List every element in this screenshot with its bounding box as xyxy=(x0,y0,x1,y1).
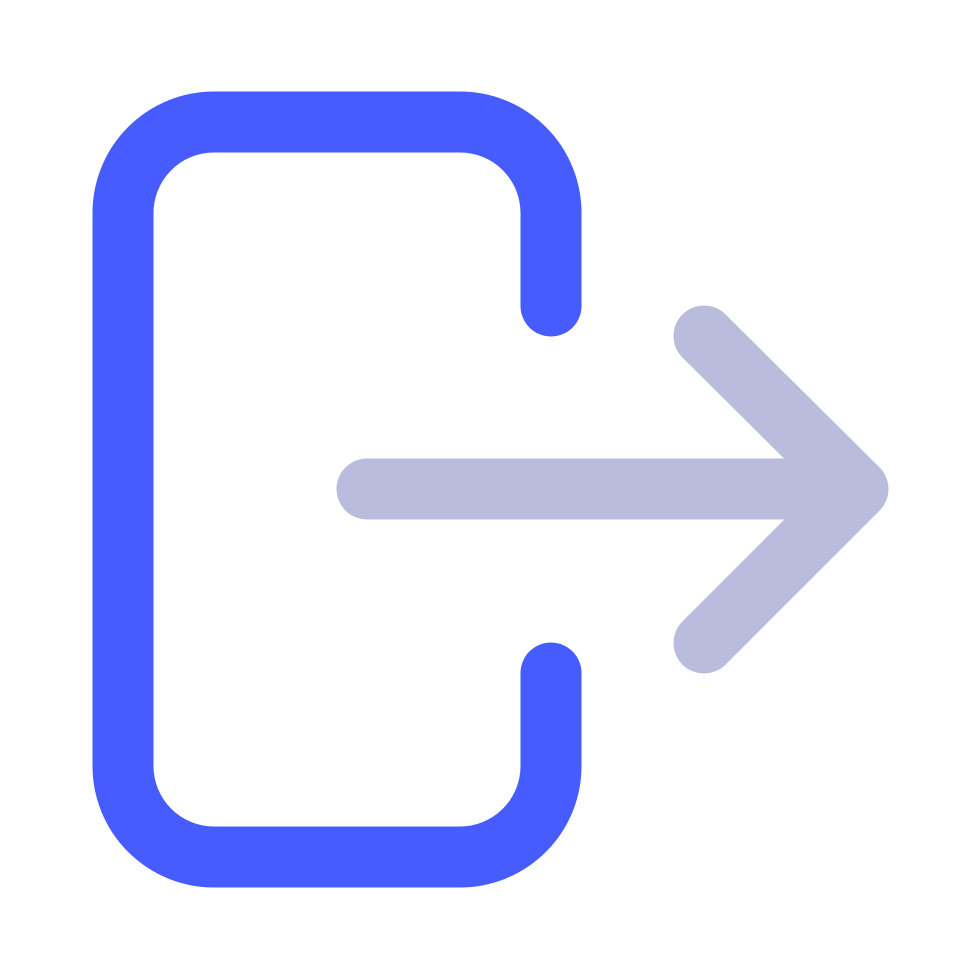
arrow: pointing right xyxy=(367,336,858,643)
icon: door frame xyxy=(123,122,551,857)
